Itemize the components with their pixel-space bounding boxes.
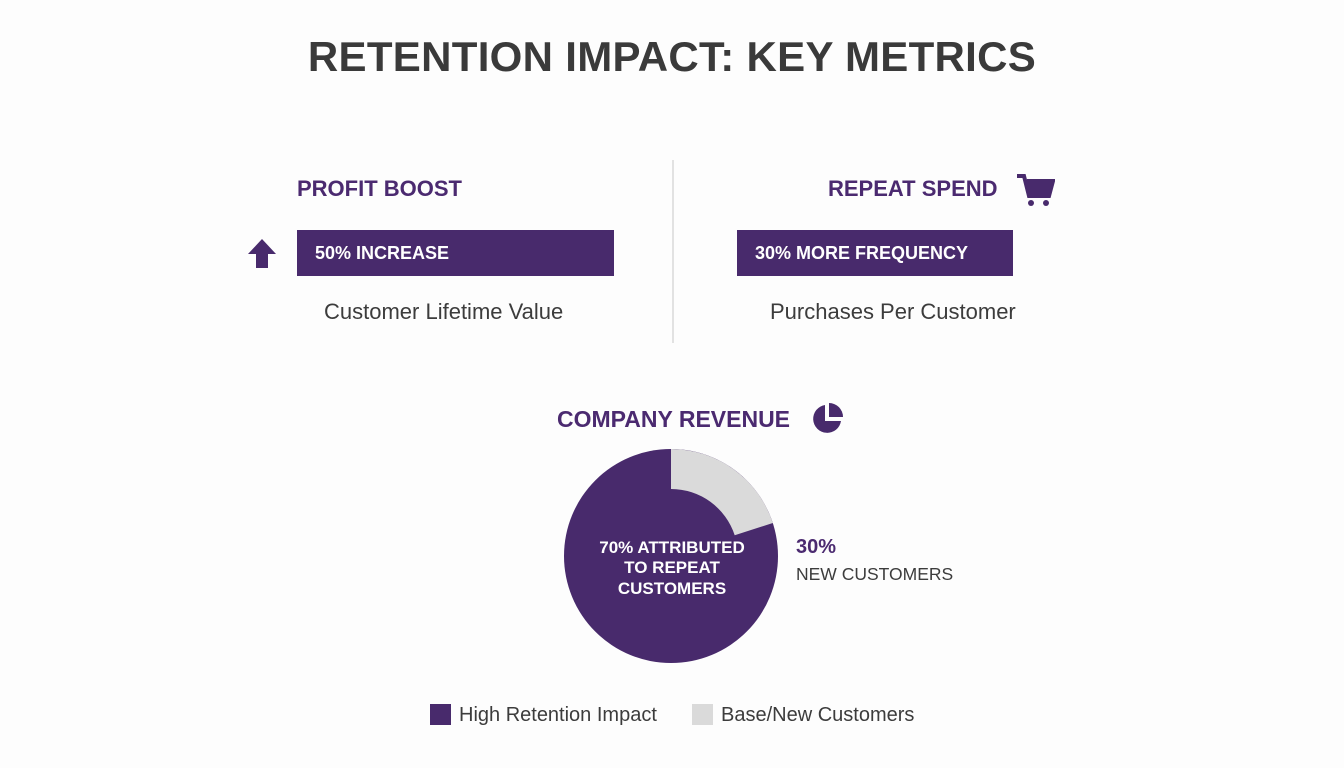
icon: up arrow bbox=[248, 239, 276, 268]
pie chart bbox=[564, 449, 778, 663]
legend item: high retention: High Retention Impact bbox=[459, 704, 657, 726]
legend bbox=[430, 704, 914, 726]
bar: 50% increase bbox=[297, 230, 614, 276]
callout: 30% new customers: 30% bbox=[796, 536, 836, 558]
heading: repeat spend: REPEAT SPEND bbox=[828, 176, 998, 201]
callout: 30% new customers bbox=[796, 536, 953, 584]
panel: repeat spend bbox=[737, 174, 1055, 324]
callout: 30% new customers: NEW CUSTOMERS bbox=[796, 564, 953, 584]
panel: profit boost bbox=[248, 176, 614, 324]
icon: pie bbox=[813, 403, 843, 433]
bar: 30% more frequency bbox=[737, 230, 1013, 276]
label: customer lifetime value: Customer Lifetime Value bbox=[324, 299, 563, 324]
label: purchases per customer: Purchases Per Customer bbox=[770, 299, 1016, 324]
pie label: 70% ATTRIBUTED bbox=[599, 538, 745, 557]
title: RETENTION IMPACT: KEY METRICS bbox=[308, 33, 1036, 80]
heading: profit boost: PROFIT BOOST bbox=[297, 176, 462, 201]
pie label: TO REPEAT bbox=[624, 558, 720, 577]
heading: company revenue: COMPANY REVENUE bbox=[557, 406, 790, 432]
bar: 50% increase: 50% INCREASE bbox=[315, 243, 449, 263]
pie label: CUSTOMERS bbox=[618, 579, 726, 598]
legend item: base/new: Base/New Customers bbox=[721, 704, 914, 726]
icon: shopping cart bbox=[1017, 174, 1055, 206]
bar: 30% more frequency: 30% MORE FREQUENCY bbox=[755, 243, 968, 263]
divider bbox=[672, 160, 674, 343]
